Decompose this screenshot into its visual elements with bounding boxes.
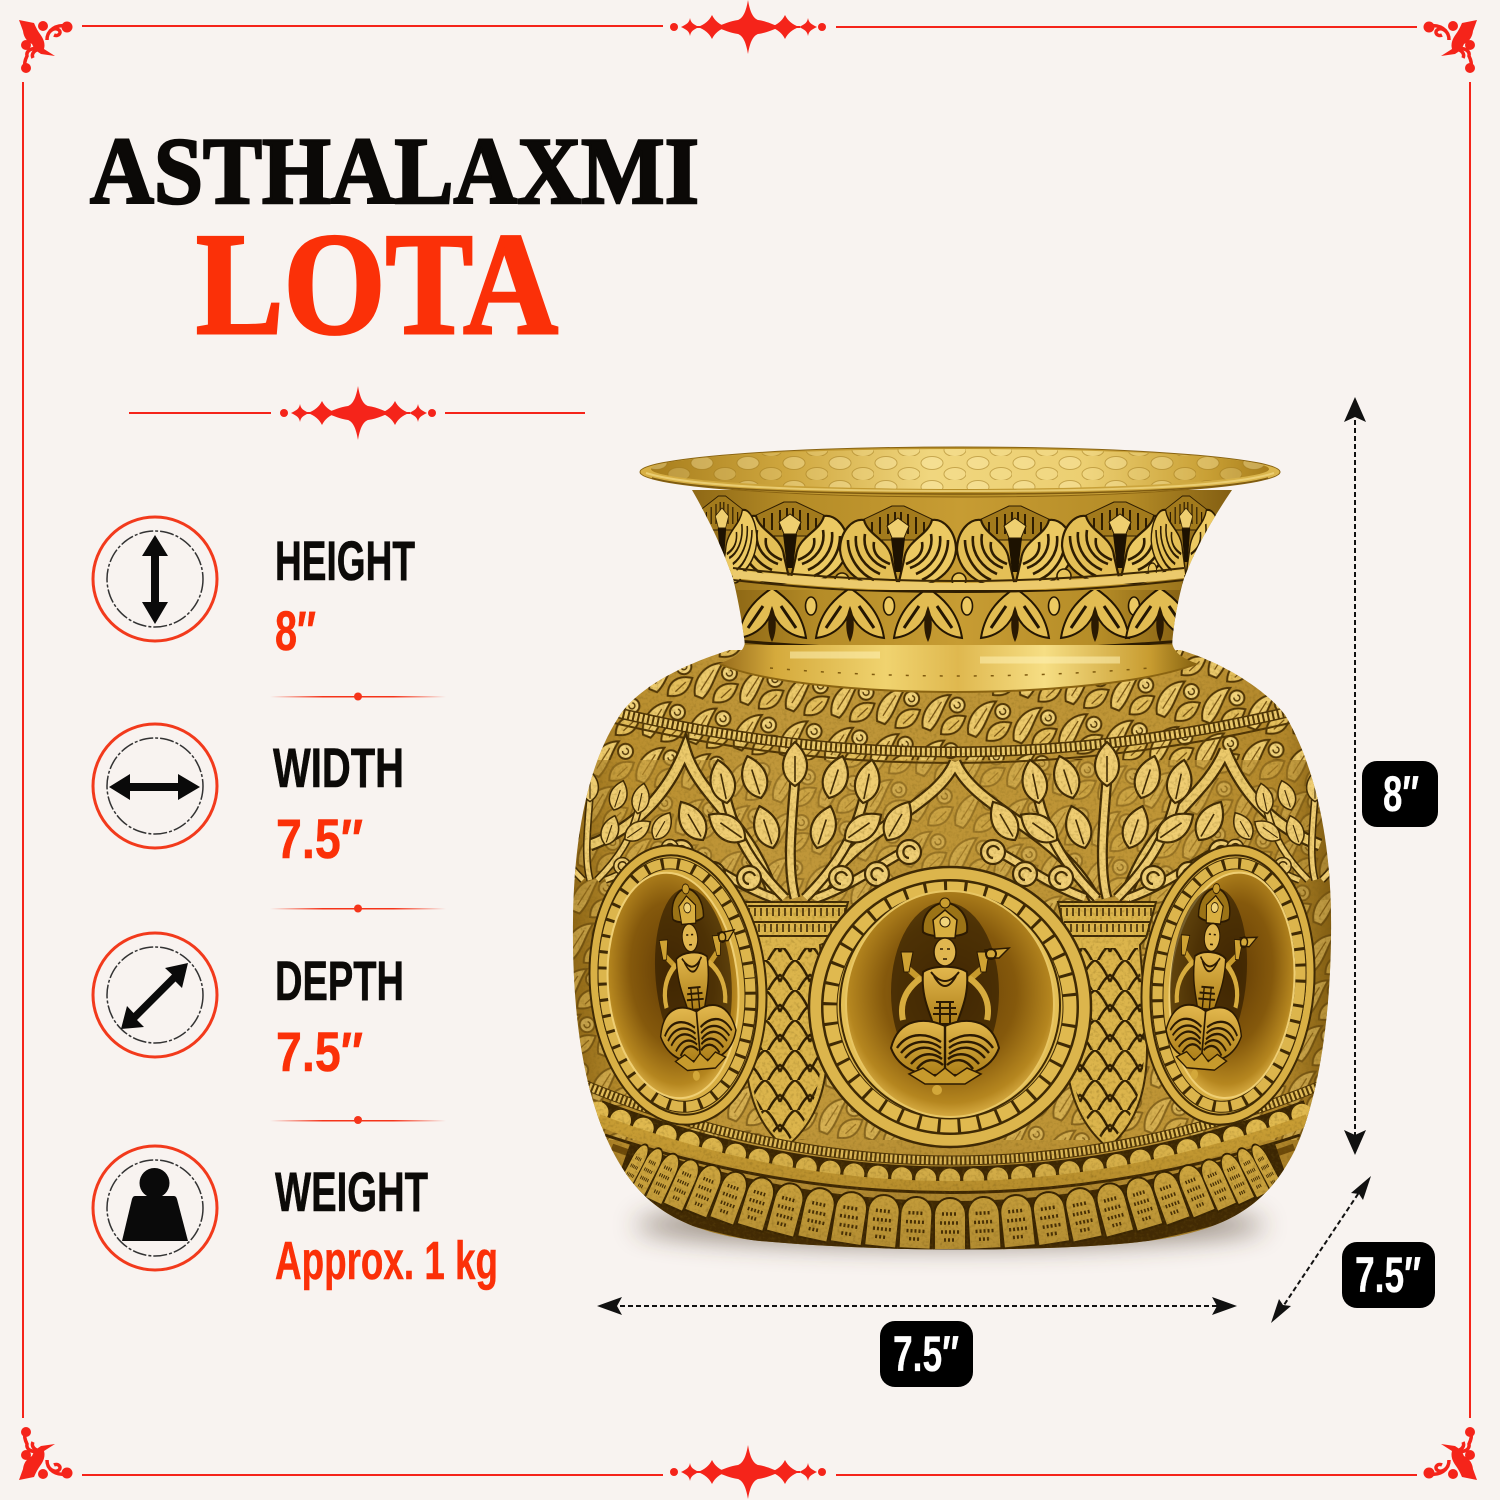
pillar right xyxy=(1058,902,1156,1148)
tree motif far right xyxy=(1226,774,1330,884)
vessel body xyxy=(572,650,1332,1250)
value: weight: Approx. 1 kg xyxy=(275,1231,498,1291)
rim interior xyxy=(651,449,1269,489)
neck band: lotus frieze xyxy=(680,488,1240,593)
corner: top left xyxy=(19,20,72,73)
spec: depth xyxy=(93,933,404,1083)
badge: 7.5 inch depth: 7.5″ xyxy=(1355,1247,1421,1303)
value: depth: 7.5″ xyxy=(276,1020,363,1083)
corner: bottom left xyxy=(19,1427,72,1480)
spec: width xyxy=(93,724,404,870)
lower bands xyxy=(585,1085,1322,1231)
title line 2: LOTA xyxy=(196,203,558,365)
deity figure xyxy=(648,880,747,1084)
tree motif right xyxy=(981,742,1233,898)
icon: depth arrow xyxy=(93,933,217,1057)
corner: top right xyxy=(1424,20,1477,73)
vessel shadow xyxy=(635,1203,1265,1247)
badge: 7.5 inch width xyxy=(880,1321,973,1387)
title divider xyxy=(129,386,585,440)
surface speckle texture xyxy=(570,650,1340,1250)
tree motif far left xyxy=(574,773,678,884)
label: depth: DEPTH xyxy=(275,949,404,1012)
icon: weight xyxy=(93,1146,217,1270)
dimension: width xyxy=(597,1297,1237,1387)
title xyxy=(90,118,699,365)
label: height: HEIGHT xyxy=(275,529,415,592)
spec: height xyxy=(93,517,415,662)
label: width: WIDTH xyxy=(273,736,404,799)
ornament: bottom centre xyxy=(670,1445,826,1499)
value: height: 8″ xyxy=(275,599,316,662)
badge: 8 inch: 8″ xyxy=(1383,766,1419,822)
divider xyxy=(270,1116,446,1124)
divider xyxy=(270,692,446,700)
tree motif left xyxy=(669,742,921,898)
badge: 8 inch xyxy=(1362,761,1438,827)
icon: width arrow xyxy=(93,724,217,848)
divider xyxy=(270,904,446,912)
neck xyxy=(718,640,1198,692)
deity figure xyxy=(891,898,1009,1095)
dimension: height xyxy=(1344,397,1438,1155)
deity figure xyxy=(1162,880,1261,1084)
label: weight: WEIGHT xyxy=(275,1160,428,1223)
title line 1: ASTHALAXMI xyxy=(90,118,699,224)
pillar left xyxy=(745,902,848,1148)
badge: 7.5 inch depth xyxy=(1342,1242,1435,1308)
icon: height arrow xyxy=(93,517,217,641)
rim xyxy=(640,447,1280,497)
value: width: 7.5″ xyxy=(276,807,363,870)
niche: left xyxy=(578,838,778,1132)
surface shading xyxy=(625,1154,1278,1250)
spec: weight xyxy=(93,1146,498,1291)
arches xyxy=(590,750,1320,900)
neck band: leaf frieze xyxy=(733,578,1184,645)
lota vessel xyxy=(572,446,1332,1266)
bottom lotus petals xyxy=(616,1142,1284,1250)
niche: right xyxy=(1130,838,1326,1132)
ornament: top centre xyxy=(670,0,826,54)
corner: bottom right xyxy=(1424,1427,1477,1480)
niche: centre xyxy=(809,867,1091,1147)
dimension: depth xyxy=(1271,1176,1435,1323)
badge: 7.5 inch width: 7.5″ xyxy=(893,1326,959,1382)
shoulder band line xyxy=(610,712,1294,763)
